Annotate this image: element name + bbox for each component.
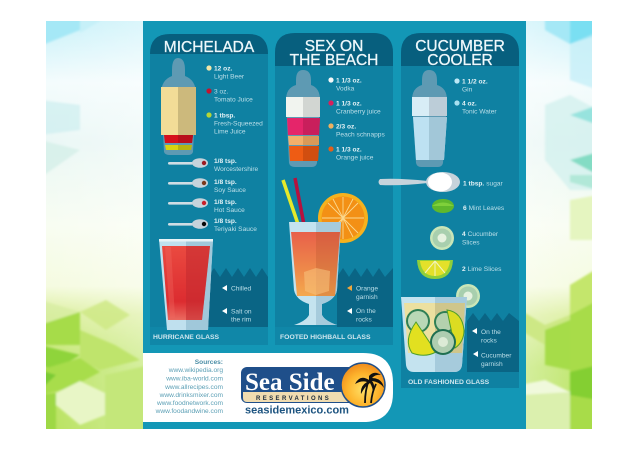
icon: lime wedge — [417, 260, 453, 279]
heading: michelada — [150, 34, 268, 56]
ingredient: lime juice: 1 tbsp. — [214, 112, 235, 120]
ingredient: light beer — [206, 65, 245, 80]
panel: cucumber cooler — [378, 33, 519, 388]
main teal poster background — [143, 21, 526, 429]
ingredient: tomato juice: Tomato Juice — [214, 96, 253, 104]
logo: sea side reservations: RESERVATIONS — [256, 396, 331, 402]
label: old fashioned glass: OLD FASHIONED GLASS — [408, 379, 490, 386]
spoon: teriyaki sauce — [168, 218, 257, 233]
note: chilled: Chilled — [231, 286, 251, 292]
text: mint leaves: 6 Mint Leaves — [463, 205, 505, 212]
spoon: soy sauce: 1/8 tsp. — [214, 179, 237, 186]
dark zigzag backdrop — [337, 268, 393, 327]
ingredient: tomato juice: 3 oz. — [214, 88, 228, 96]
spoon: soy sauce: Soy Sauce — [214, 187, 246, 194]
text: lime slices: 2 Lime Slices — [462, 266, 502, 273]
spoon: hot sauce — [168, 198, 245, 214]
label: footed highball glass: FOOTED HIGHBALL GLASS — [280, 334, 371, 341]
ingredient: peach schnapps: Peach schnapps — [336, 132, 385, 138]
note: cucumber garnish: Cucumber — [481, 352, 512, 360]
text: cucumber slices: Slices — [462, 240, 480, 246]
note: orange garnish — [347, 285, 378, 301]
note: cucumber garnish — [473, 351, 512, 368]
ingredient: light beer: Light Beer — [214, 74, 245, 80]
shaker with gin and tonic — [412, 70, 447, 167]
panel: michelada — [150, 34, 268, 345]
label: hurricane glass: HURRICANE GLASS — [153, 334, 220, 341]
ingredient: peach schnapps — [328, 123, 385, 138]
ingredient: cranberry juice — [328, 100, 381, 116]
note: on the rocks: On the — [481, 329, 501, 336]
shaker with layers — [286, 70, 320, 167]
logo: sea side reservations: Sea Side — [245, 369, 335, 396]
hurricane glass — [159, 239, 213, 330]
ingredient: vodka: 1 1/3 oz. — [336, 78, 362, 84]
ingredient: cranberry juice: 1 1/3 oz. — [336, 100, 362, 108]
ingredient: orange juice: 1 1/3 oz. — [336, 146, 362, 154]
ingredient: tomato juice — [206, 88, 253, 104]
ingredient: cranberry juice: Cranberry juice — [336, 108, 381, 116]
ingredient: tonic water: Tonic Water — [462, 108, 497, 116]
sources list: www.wikipedia.org — [168, 367, 223, 374]
ingredient: vodka: Vodka — [336, 86, 355, 92]
card background — [401, 33, 519, 388]
dark zigzag backdrop — [467, 313, 519, 372]
ingredient: tonic water — [454, 100, 497, 116]
spoon: worcestershire: 1/8 tsp. — [214, 158, 237, 165]
ingredient: tonic water: 4 oz. — [462, 100, 477, 108]
heading: michelada: MICHELADA — [164, 39, 255, 56]
note: on the rocks: rocks — [481, 338, 497, 344]
ingredient: gin: 1 1/2 oz. — [462, 78, 488, 86]
note: on the rocks: On the — [356, 308, 376, 315]
heading: sex on the beach: THE BEACH — [290, 52, 378, 69]
ingredient: orange juice: Orange juice — [336, 154, 374, 162]
note: salt on the rim: the rim — [231, 316, 252, 324]
note: on the rocks — [472, 328, 501, 344]
icon: mint leaf — [432, 199, 454, 213]
footed highball glass — [289, 222, 341, 325]
note: cucumber garnish: garnish — [481, 361, 503, 368]
ingredient: gin: Gin — [462, 86, 473, 94]
sources list — [155, 359, 224, 415]
sources list: Sources: — [195, 359, 223, 366]
spoon: worcestershire — [168, 158, 259, 173]
note: on the rocks: rocks — [356, 316, 372, 324]
card background — [150, 34, 268, 345]
spoon: hot sauce: Hot Sauce — [214, 207, 245, 214]
ingredient: peach schnapps: 2/3 oz. — [336, 124, 356, 130]
note: on the rocks — [347, 308, 376, 324]
footer banner — [143, 353, 393, 422]
spoon: soy sauce — [168, 178, 246, 194]
sources list: www.allrecipes.com — [164, 384, 223, 391]
heading: cucumber cooler: COOLER — [427, 52, 493, 69]
spoon of sugar — [378, 172, 460, 192]
ingredient: orange juice — [328, 146, 374, 162]
text: cucumber slices: 4 Cucumber — [462, 231, 499, 238]
right decorative strip — [526, 21, 592, 429]
old fashioned glass — [401, 297, 467, 372]
cucumber garnish on rim — [456, 284, 480, 308]
note: orange garnish: garnish — [356, 294, 378, 301]
heading: cucumber cooler — [401, 33, 519, 69]
logo: sea side reservations: seasidemexico.com — [245, 404, 349, 416]
ingredient: light beer: 12 oz. — [214, 66, 232, 72]
straws — [283, 178, 305, 230]
note: orange garnish: Orange — [356, 286, 378, 292]
logo: sea side reservations — [241, 363, 385, 416]
ingredient: vodka — [328, 77, 362, 92]
spoon: teriyaki sauce: 1/8 tsp. — [214, 218, 237, 225]
text: cucumber slices — [462, 231, 499, 246]
ingredient: gin — [454, 78, 488, 94]
note: salt on the rim: Salt on — [231, 308, 252, 316]
spoon: teriyaki sauce: Teriyaki Sauce — [214, 226, 257, 233]
sources list: www.drinksmixer.com — [159, 392, 224, 399]
note: salt on the rim — [222, 308, 252, 324]
card background — [275, 33, 393, 345]
panel: sex on the beach — [275, 33, 393, 345]
ingredient: lime juice: Fresh-Squeezed — [214, 120, 263, 128]
ingredient: lime juice: Lime Juice — [214, 128, 246, 136]
orange slice garnish — [318, 193, 368, 243]
note: chilled — [222, 285, 251, 292]
heading: sex on the beach — [275, 33, 393, 69]
ingredient: lime juice — [206, 112, 263, 136]
dark zigzag backdrop — [208, 268, 268, 327]
sources list: www.iba-world.com — [165, 376, 224, 382]
text: sugar: 1 tbsp. sugar — [463, 180, 504, 188]
shaker with michelada layers — [161, 58, 196, 155]
heading: cucumber cooler: CUCUMBER — [415, 38, 505, 55]
icon: cucumber slice — [430, 226, 454, 250]
spoon: worcestershire: Worcestershire — [214, 166, 259, 173]
heading: sex on the beach: SEX ON — [305, 38, 363, 55]
icon: sun with palm trees — [341, 363, 385, 407]
spoon: hot sauce: 1/8 tsp. — [214, 199, 237, 206]
left decorative strip — [46, 21, 143, 429]
sources list: www.foodnetwork.com — [156, 400, 224, 407]
sources list: www.foodandwine.com — [155, 408, 224, 415]
